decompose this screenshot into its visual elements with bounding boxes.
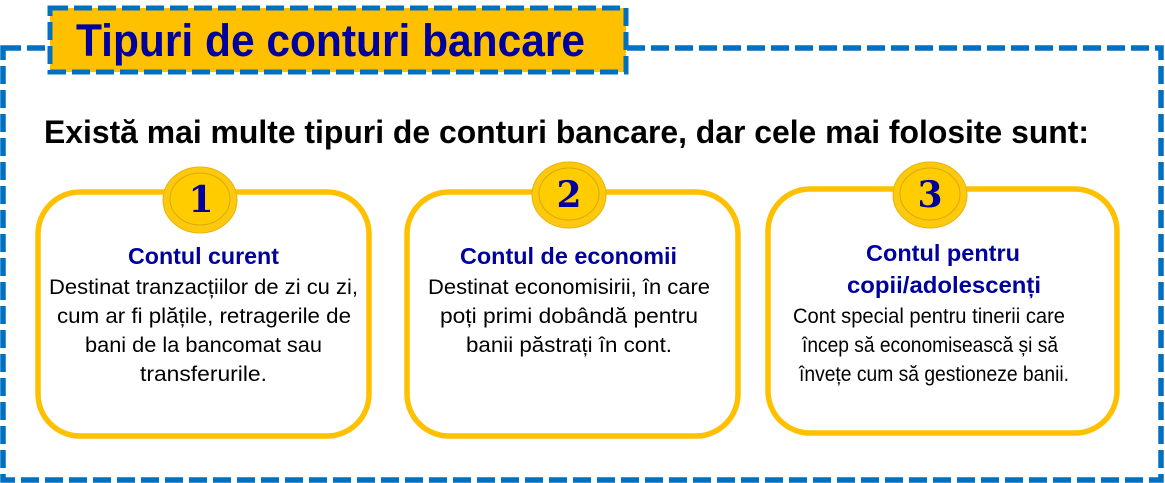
text: contul de economii: Contul de economii bbox=[460, 243, 677, 269]
text: contul de economii: poți primi dobândă pentru bbox=[440, 305, 698, 328]
text: contul pentru copii/adolescenti: copii/adolescenți bbox=[847, 272, 1041, 299]
icon: coin 3 bbox=[893, 162, 967, 228]
panel: contul de economii bbox=[407, 162, 738, 436]
text: contul pentru copii/adolescenti bbox=[793, 240, 1069, 386]
text: contul curent: cum ar fi plățile, retragerile de bbox=[57, 305, 351, 328]
text: contul curent: transferurile. bbox=[140, 363, 267, 386]
text: contul de economii: banii păstrați în cont. bbox=[466, 334, 672, 357]
text: contul curent: Contul curent bbox=[128, 243, 279, 269]
icon: coin 1: 1 bbox=[188, 179, 214, 221]
panel: contul curent bbox=[38, 167, 369, 436]
icon: coin 3: 3 bbox=[917, 174, 943, 216]
text: contul curent bbox=[49, 243, 358, 386]
intro sentence: Există mai multe tipuri de conturi bancare, dar cele mai folosite sunt: bbox=[44, 114, 1089, 150]
text: contul de economii: Destinat economisirii, în care bbox=[428, 276, 710, 299]
icon: coin 1 bbox=[163, 167, 237, 233]
text: contul curent: Destinat tranzacțiilor de zi cu zi, bbox=[49, 276, 358, 299]
text: contul pentru copii/adolescenti: învețe cum să gestioneze banii. bbox=[798, 363, 1069, 386]
icon: coin 2: 2 bbox=[556, 174, 582, 216]
panel: contul pentru copii/adolescenti bbox=[768, 162, 1117, 433]
text: contul pentru copii/adolescenti: Cont special pentru tinerii care bbox=[793, 305, 1065, 328]
text: contul pentru copii/adolescenti: încep să economisească și să bbox=[801, 334, 1058, 357]
text: contul de economii bbox=[428, 243, 710, 357]
text: contul curent: bani de la bancomat sau bbox=[85, 334, 322, 357]
title banner: Tipuri de conturi bancare bbox=[76, 15, 585, 66]
icon: coin 2 bbox=[532, 162, 606, 228]
text: contul pentru copii/adolescenti: Contul pentru bbox=[866, 240, 1020, 266]
